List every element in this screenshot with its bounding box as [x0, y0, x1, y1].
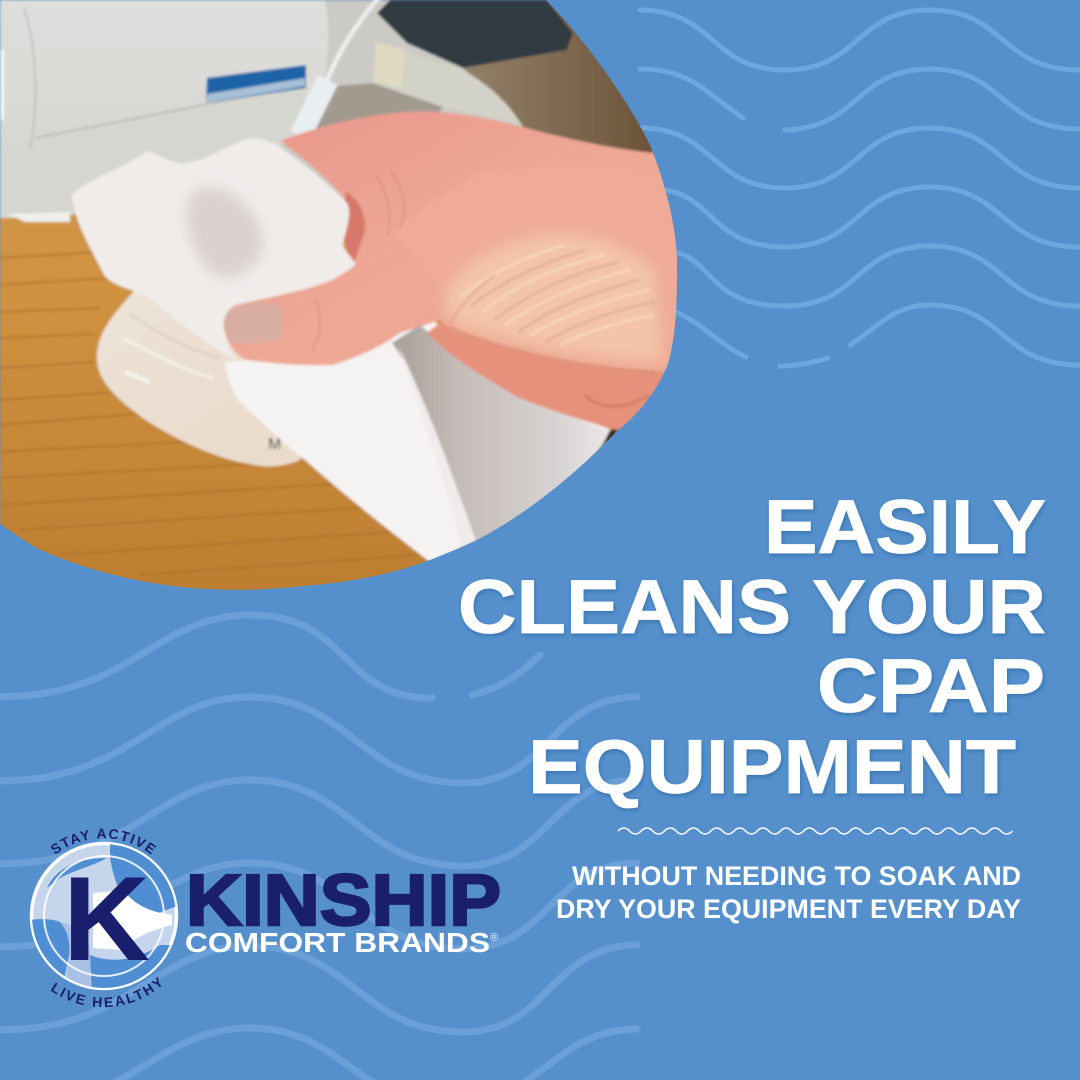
- hand: [223, 111, 690, 376]
- title: EASILY: [764, 485, 1046, 570]
- logo emblem: [30, 828, 178, 1008]
- logo wordmark COMFORT BRANDS: COMFORT BRANDS: [185, 927, 490, 958]
- title: CPAP: [817, 644, 1045, 729]
- squiggle divider: [618, 828, 1012, 834]
- wipe lower part: [225, 315, 620, 562]
- mask cushion: M: [268, 436, 281, 453]
- decorative waves top right: [640, 10, 1080, 366]
- subtitle: WITHOUT NEEDING TO SOAK AND: [572, 861, 1021, 891]
- CPAP machine: [0, 0, 328, 222]
- wipe upper part: [72, 138, 356, 362]
- mask cushion: [94, 290, 302, 469]
- background box and hose: [280, 0, 654, 201]
- thumbnail: [223, 303, 283, 344]
- subtitle: [556, 861, 1021, 924]
- registered mark: ®: [490, 932, 498, 944]
- decorative waves lower left: [0, 615, 637, 1080]
- title: CLEANS YOUR: [458, 565, 1046, 650]
- air tubing: [300, 0, 380, 136]
- title: [458, 485, 1046, 810]
- subtitle: DRY YOUR EQUIPMENT EVERY DAY: [556, 894, 1021, 924]
- emblem letter K: K: [63, 852, 150, 986]
- stay active arc text: STAY ACTIVE: [51, 828, 156, 854]
- live healthy arc text: LIVE HEALTHY: [50, 976, 162, 1008]
- photo: hand wiping CPAP mask: [0, 0, 700, 600]
- wooden table: [0, 212, 621, 590]
- title: EQUIPMENT: [528, 725, 1016, 810]
- logo wordmark KINSHIP: KINSHIP: [186, 861, 501, 941]
- lower finger: [427, 315, 680, 430]
- logo: Kinship Comfort Brands: [30, 828, 501, 1008]
